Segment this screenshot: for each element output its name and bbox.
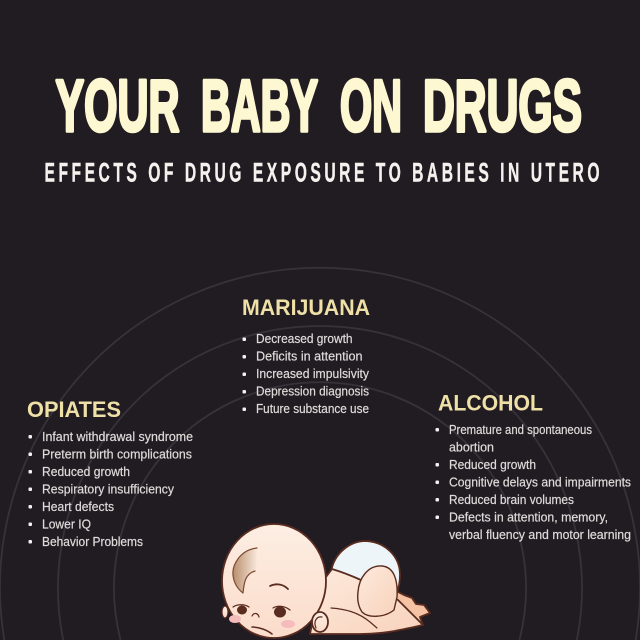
icon: sleeping baby [222, 524, 430, 638]
heading: opiates: OPIATES [27, 397, 121, 422]
heading: marijuana: MARIJUANA [242, 295, 370, 320]
list: alcohol effects: verbal fluency and motor learning [449, 528, 631, 542]
list: alcohol effects [436, 423, 631, 542]
title: YOUR [56, 66, 180, 147]
list: alcohol effects: Cognitive delays and impairments [449, 476, 631, 490]
list: alcohol effects: Defects in attention, memory, [449, 510, 608, 524]
list: alcohol effects: Premature and spontaneous [449, 423, 592, 437]
list: alcohol effects: Reduced brain volumes [449, 493, 574, 507]
list: marijuana effects: Increased impulsivity [256, 367, 370, 381]
heading: alcohol: ALCOHOL [438, 390, 543, 416]
list: opiates effects: Preterm birth complications [42, 448, 192, 462]
title: BABY [201, 66, 318, 147]
panel: alcohol [436, 390, 631, 542]
list: marijuana effects: Depression diagnosis [256, 384, 369, 398]
list: opiates effects [28, 430, 193, 549]
list: marijuana effects [242, 332, 370, 416]
panel: marijuana [242, 295, 370, 416]
list: alcohol effects: abortion [449, 440, 494, 454]
list: opiates effects: Respiratory insufficiency [42, 482, 175, 496]
panel: opiates [27, 397, 193, 549]
list: alcohol effects: Reduced growth [449, 458, 536, 472]
list: marijuana effects: Decreased growth [256, 332, 353, 346]
list: opiates effects: Lower IQ [42, 518, 91, 532]
list: marijuana effects: Future substance use [256, 402, 369, 416]
subtitle: EFFECTS OF DRUG EXPOSURE TO BABIES IN UTERO [44, 157, 600, 188]
title [56, 66, 582, 147]
list: opiates effects: Reduced growth [42, 465, 130, 479]
list: opiates effects: Behavior Problems [42, 535, 143, 549]
list: opiates effects: Heart defects [42, 500, 114, 514]
list: marijuana effects: Deficits in attention [256, 350, 363, 364]
list: opiates effects: Infant withdrawal syndrome [42, 430, 193, 444]
title: ON [340, 66, 402, 147]
